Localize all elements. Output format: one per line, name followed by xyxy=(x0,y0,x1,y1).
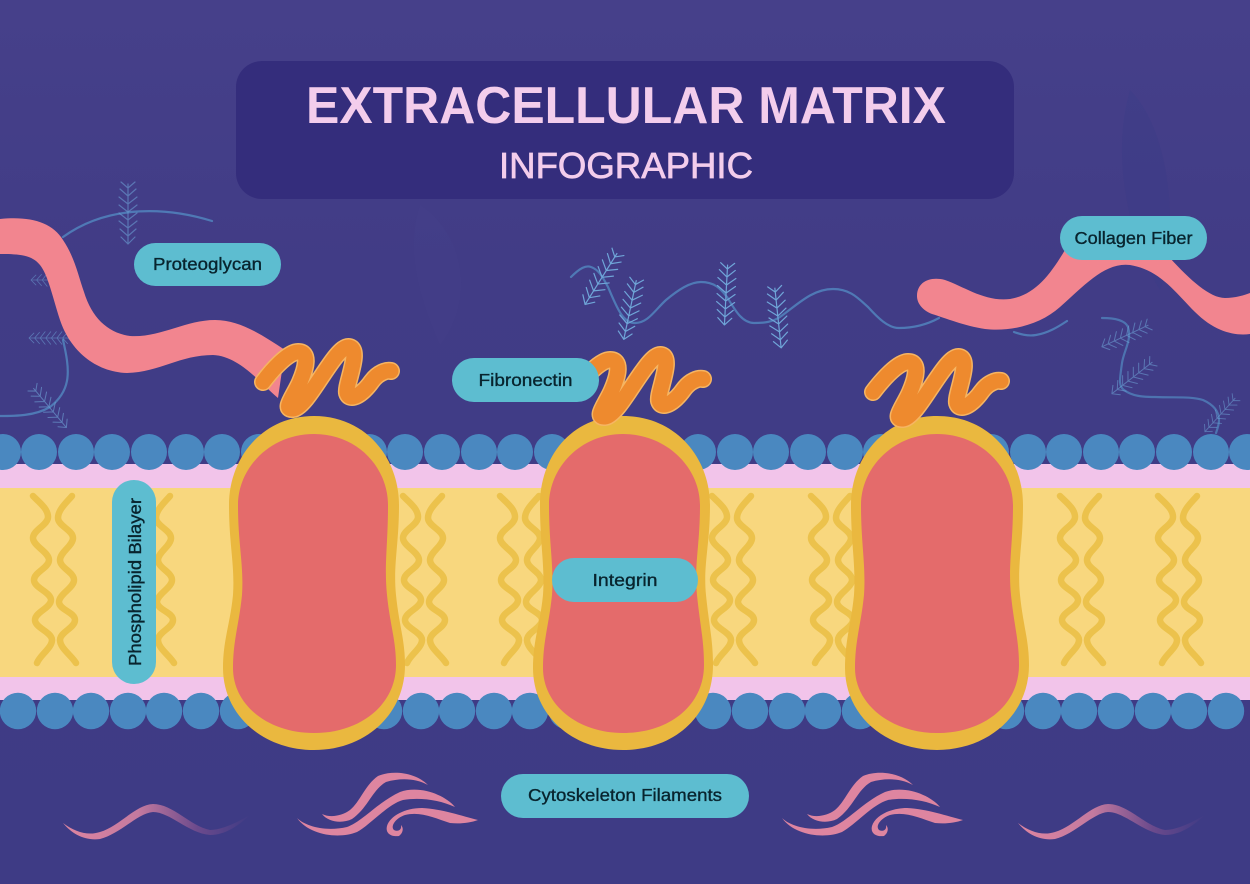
label: collagen fiber xyxy=(1060,216,1207,260)
label: phospholipid bilayer: Phospholipid Bilayer xyxy=(125,498,145,666)
label: cytoskeleton filaments xyxy=(501,774,749,818)
upper blue heads xyxy=(0,434,1250,470)
fibronectin 1 xyxy=(263,347,391,409)
yellow lipid core xyxy=(0,488,1250,677)
integrin 3 xyxy=(845,416,1029,750)
title: EXTRACELLULAR MATRIX xyxy=(306,77,946,135)
collagen fiber: right xyxy=(917,250,1250,334)
cytoskeleton filament 2 xyxy=(297,773,478,836)
fibronectin 3 xyxy=(873,357,1001,419)
label: collagen fiber: Collagen Fiber xyxy=(1074,228,1193,248)
subtitle: INFOGRAPHIC xyxy=(499,145,753,186)
cytoskeleton filament 1 xyxy=(63,804,250,839)
label: proteoglycan: Proteoglycan xyxy=(153,254,262,274)
title panel xyxy=(236,61,1014,199)
label: proteoglycan xyxy=(134,243,281,286)
proteoglycan strand: right xyxy=(1099,318,1241,436)
proteoglycan strand: center xyxy=(571,247,1067,349)
label: integrin xyxy=(552,558,698,602)
fibronectin 2 xyxy=(575,355,703,417)
proteoglycan strand: left xyxy=(0,182,212,432)
label: cytoskeleton filaments: Cytoskeleton Filaments xyxy=(528,785,722,805)
phospholipid bilayer xyxy=(0,434,1250,729)
label: fibronectin: Fibronectin xyxy=(478,370,572,390)
integrin 2 xyxy=(533,416,713,750)
cytoskeleton filament 4 xyxy=(1018,804,1205,839)
collagen fiber: left xyxy=(0,218,285,398)
pink head band xyxy=(0,464,1250,700)
lipid tails xyxy=(33,496,1201,663)
label: phospholipid bilayer xyxy=(112,480,156,684)
cytoskeleton filament 3 xyxy=(782,773,963,836)
label: fibronectin xyxy=(452,358,599,402)
integrin 1 xyxy=(223,416,405,750)
lower blue heads xyxy=(0,693,1244,729)
label: integrin: Integrin xyxy=(592,570,658,590)
